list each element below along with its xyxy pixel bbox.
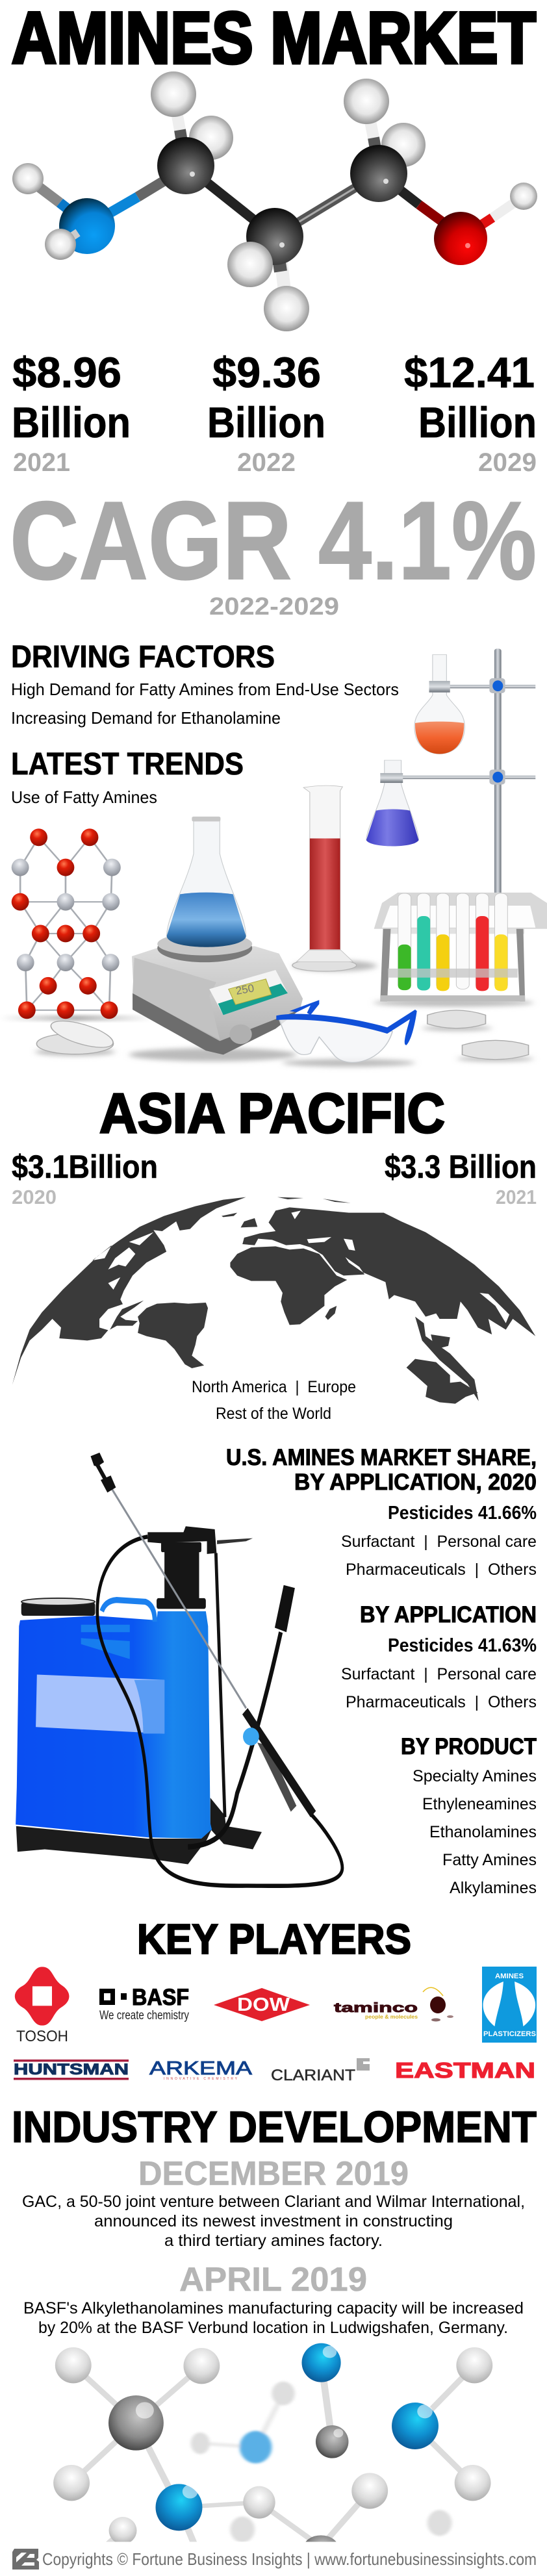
April development text: BASF's Alkylethanolamines manufacturing capacity will be increased [23,2299,524,2317]
ground shadows [35,960,534,1067]
stat: 2022: 2022 [237,448,296,477]
heading: driving factors: DRIVING FACTORS [11,640,275,674]
by product heading: BY PRODUCT [401,1734,537,1759]
backpack sprayer illustration [16,1453,342,1886]
stat: 2029: 2029 [478,448,537,477]
by product list: Ethanolamines [429,1823,537,1841]
other regions: North America | Europe [192,1378,356,1396]
logo: Clariant [271,2058,370,2084]
date: December 2019: DECEMBER 2019 [138,2155,409,2193]
test tube rack [374,893,547,1001]
petri dishes [36,1010,529,1060]
driving factors list [11,680,399,728]
pump [147,1526,253,1609]
driving factors list: Increasing Demand for Ethanolamine [11,708,281,728]
stat: 2029 [404,348,537,477]
driving factors list: High Demand for Fatty Amines from End-Use Sectors [11,680,399,699]
stat: 2029: Billion [418,398,537,446]
by product list: Ethyleneamines [422,1795,537,1813]
filler lid [21,1598,95,1616]
logo: Dow [214,1988,310,2021]
stat: 2021: 2021 [13,448,70,477]
stat: 2021: $8.96 [12,348,121,396]
by product list: Alkylamines [450,1879,537,1897]
U.S. share list: Pharmaceuticals | Others [346,1561,537,1579]
heading: latest trends: LATEST TRENDS [11,747,244,782]
December development text [22,2193,525,2250]
ring stand [401,648,535,897]
regional value 2020: $3.1Billion [12,1149,158,1185]
stat: 2029: $12.41 [404,348,535,396]
by application heading: BY APPLICATION [360,1602,537,1627]
by product list: Fatty Amines [442,1851,537,1869]
April development text [23,2299,524,2337]
by application list: Pharmaceuticals | Others [346,1693,537,1711]
by product list [413,1767,537,1897]
logo: Clariant: CLARIANT [271,2067,355,2084]
logo: Taminco [334,1987,453,2022]
balance display reading: 250 [235,982,255,997]
world map [12,1197,535,1404]
CAGR period: 2022-2029 [209,593,339,620]
lance [90,1453,313,1814]
blue conical flask [167,817,246,947]
balance [132,932,303,1054]
latest trends text: Use of Fatty Amines [11,787,157,807]
lab equipment illustration [0,648,547,1067]
logo: Taminco: taminco [334,2001,418,2015]
purple conical flask [366,760,418,846]
stat: 2022: $9.36 [212,348,321,396]
logo: Eastman: EASTMAN [395,2058,535,2082]
April development text: by 20% at the BASF Verbund location in Ludwigshafen, Germany. [38,2319,508,2337]
logo: BASF: We create chemistry [99,2009,189,2022]
molecule illustration [12,71,537,331]
measuring cylinder [292,785,357,971]
logo: Taminco: people & molecules [365,2014,418,2020]
December development text: announced its newest investment in constructing [94,2212,453,2230]
by application list: Surfactant | Personal care [341,1665,537,1683]
logo: Amines Plasticizers [482,1967,537,2043]
regional value 2021: 2021 [496,1186,537,1208]
U.S. market share heading: BY APPLICATION, 2020 [294,1470,537,1495]
logo: Dow: DOW [237,1995,290,2015]
other regions: Rest of the World [216,1405,331,1423]
regional value 2021 [385,1149,537,1208]
logo: Arkema: ARKEMA [149,2058,253,2079]
crystal lattice [12,828,121,1019]
stat: 2022: Billion [207,398,325,446]
bottom molecules illustration [53,2343,492,2560]
U.S. share list: Surfactant | Personal care [341,1533,537,1551]
stat: 2022 [207,348,325,477]
hose [97,1537,342,1886]
by application list [341,1635,537,1711]
by product list: Specialty Amines [413,1767,537,1785]
sphere highlights [136,2346,433,2499]
U.S. share list: Pesticides 41.66% [388,1503,537,1524]
stat: 2021 [12,348,131,477]
by application list: Pesticides 41.63% [388,1635,537,1656]
pump rod [216,1553,225,1817]
date: April 2019: APRIL 2019 [179,2261,367,2299]
U.S. share list [341,1503,537,1579]
round flask [414,655,464,754]
logo: Huntsman: HUNTSMAN [14,2061,129,2078]
regional value 2020 [12,1149,158,1208]
December development text: a third tertiary amines factory. [164,2232,383,2250]
regional value 2020: 2020 [12,1186,57,1208]
logo: Amines Plasticizers: PLASTICIZERS [483,2030,536,2038]
safety goggles [276,1000,417,1062]
footer logo [12,2549,39,2570]
logo: Arkema: INNOVATIVE CHEMISTRY [164,2077,238,2081]
stat: 2021: Billion [12,398,131,446]
December development text: GAC, a 50-50 joint venture between Clariant and Wilmar International, [22,2193,525,2211]
other regions [192,1378,356,1423]
logo: Tosoh: TOSOH [16,2028,68,2045]
strap [210,1798,262,1850]
logo: Amines Plasticizers: AMINES [495,1972,524,1980]
logo: BASF [99,1985,189,2022]
base [16,1826,211,1864]
U.S. market share heading [226,1445,537,1495]
logo: BASF: BASF [132,1985,189,2010]
logo: Huntsman [14,2060,129,2080]
heading: key players: KEY PLAYERS [137,1915,411,1963]
pump handle [188,1585,295,1847]
logo: Tosoh [15,1967,69,2045]
heading: asia pacific: ASIA PACIFIC [99,1082,445,1145]
tank [16,1611,212,1839]
